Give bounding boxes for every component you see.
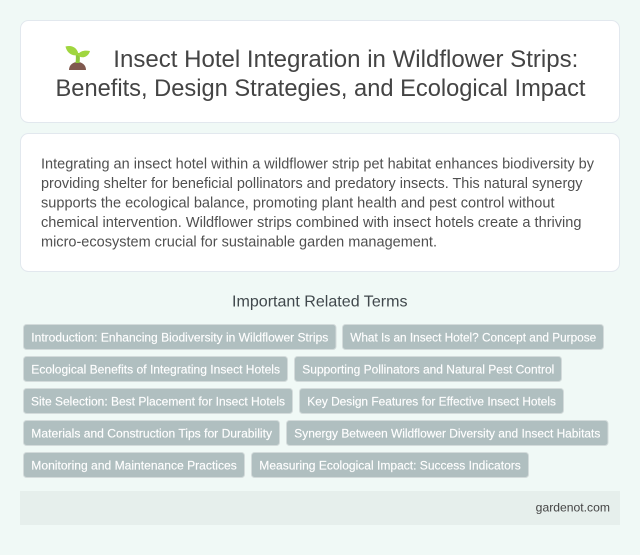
tag: ecological benefits — [24, 356, 288, 382]
title — [56, 46, 586, 102]
tag: what is an insect hotel — [342, 324, 604, 350]
tag: synergy: Synergy Between Wildflower Diversity and Insect Habitats — [294, 426, 600, 440]
tag: monitoring and maintenance: Monitoring and Maintenance Practices — [31, 458, 237, 472]
tag: ecological benefits: Ecological Benefits of Integrating Insect Hotels — [31, 362, 280, 376]
tag: synergy — [286, 420, 608, 446]
heading: important related terms: Important Related Terms — [232, 294, 408, 310]
footer — [20, 491, 620, 525]
text block: introduction paragraph: Integrating an insect hotel within a wildflower strip pet habitat enhances biodiversity by — [41, 156, 595, 172]
tag list — [24, 324, 608, 478]
icon: seedling — [66, 46, 90, 70]
title: Insect Hotel Integration in Wildflower Strips: — [113, 46, 578, 73]
tag: site selection — [24, 388, 292, 414]
tag: key design features: Key Design Features for Effective Insect Hotels — [307, 394, 556, 408]
tag: measuring ecological impact: Measuring Ecological Impact: Success Indicators — [259, 458, 521, 472]
tag: monitoring and maintenance — [24, 452, 244, 478]
tag: introduction — [24, 324, 336, 350]
tag: what is an insect hotel: What Is an Insect Hotel? Concept and Purpose — [350, 330, 596, 344]
text block: introduction paragraph: providing shelter for beneficial pollinators and predatory insects. This natural synergy — [41, 176, 583, 192]
tag: introduction: Introduction: Enhancing Biodiversity in Wildflower Strips — [31, 330, 328, 344]
panel: title card — [20, 20, 620, 122]
tag: materials and construction: Materials and Construction Tips for Durability — [31, 426, 273, 440]
panel: introduction card — [20, 134, 620, 272]
tag: supporting pollinators — [294, 356, 562, 382]
text block: introduction paragraph: supports the ecological balance, promoting plant health and pest control without — [41, 196, 554, 212]
text block: introduction paragraph: chemical intervention. Wildflower strips combined with insect hotels create a thriving — [41, 215, 582, 231]
tag: key design features — [300, 388, 564, 414]
tag: measuring ecological impact — [252, 452, 528, 478]
title: Benefits, Design Strategies, and Ecological Impact — [56, 75, 586, 102]
tag: site selection: Site Selection: Best Placement for Insect Hotels — [31, 394, 285, 408]
text block: introduction paragraph — [41, 156, 595, 250]
tag: supporting pollinators: Supporting Pollinators and Natural Pest Control — [302, 362, 554, 376]
tag: materials and construction — [24, 420, 280, 446]
text block: introduction paragraph: micro-ecosystem crucial for sustainable garden management. — [41, 234, 437, 250]
footer source text: gardenot.com — [536, 500, 610, 514]
